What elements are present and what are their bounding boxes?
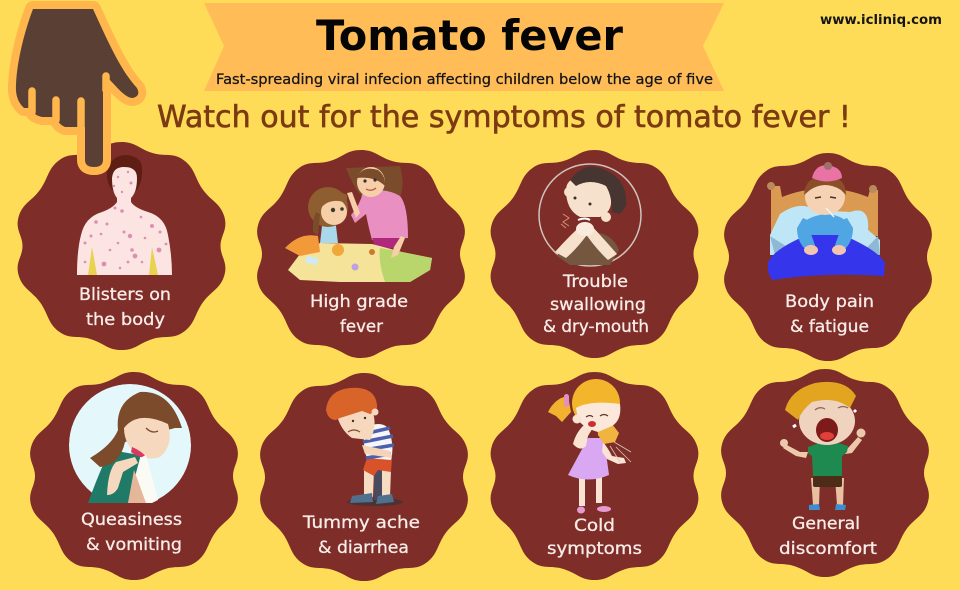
icon: boy holding stomach	[326, 388, 403, 506]
label: & diarrhea	[318, 538, 409, 557]
panel: tummy ache and diarrhea	[260, 373, 468, 581]
icon: sick boy in bed	[767, 162, 885, 280]
title banner	[204, 3, 724, 91]
label	[310, 292, 408, 336]
label	[81, 510, 182, 554]
label: Trouble	[562, 272, 628, 291]
label: Queasiness	[81, 510, 182, 529]
label: fever	[340, 317, 383, 336]
label: Blisters on	[79, 285, 171, 304]
icon: sneezing girl	[548, 379, 631, 514]
icon: crying boy	[780, 382, 866, 510]
subtitle: Fast-spreading viral infecion affecting children below the age of five	[216, 72, 713, 88]
label: discomfort	[779, 539, 878, 558]
panel: high grade fever	[257, 150, 465, 358]
label: Body pain	[785, 292, 874, 311]
icon: mother checking child's forehead	[285, 166, 432, 282]
label	[547, 516, 642, 558]
label: symptoms	[547, 539, 642, 558]
label: Cold	[574, 516, 615, 535]
label: General	[792, 514, 860, 533]
label	[79, 285, 171, 329]
panel: body pain and fatigue	[724, 153, 932, 361]
label: High grade	[310, 292, 408, 311]
icon: nauseous girl in circle	[69, 384, 191, 506]
label	[779, 514, 878, 558]
icon: boy holding throat in ring	[539, 164, 641, 266]
label	[302, 513, 420, 557]
label	[543, 272, 649, 336]
label	[785, 292, 874, 336]
website url: www.icliniq.com	[820, 13, 942, 28]
label: & dry-mouth	[543, 317, 649, 336]
title: Tomato fever	[316, 11, 623, 60]
label: the body	[86, 310, 165, 329]
panel: cold symptoms	[491, 372, 698, 580]
panel: blisters on the body	[18, 142, 225, 350]
icon: pointing hand	[16, 9, 138, 167]
panel: queasiness and vomiting	[30, 372, 238, 580]
label: Tummy ache	[302, 513, 420, 532]
label: & fatigue	[790, 317, 869, 336]
heading: Watch out for the symptoms of tomato fever !	[157, 100, 851, 135]
panel: general discomfort	[721, 369, 929, 577]
panel: trouble swallowing and dry mouth	[491, 150, 698, 358]
icon: torso with blisters	[77, 155, 172, 275]
label: swallowing	[550, 295, 646, 314]
label: & vomiting	[86, 535, 182, 554]
